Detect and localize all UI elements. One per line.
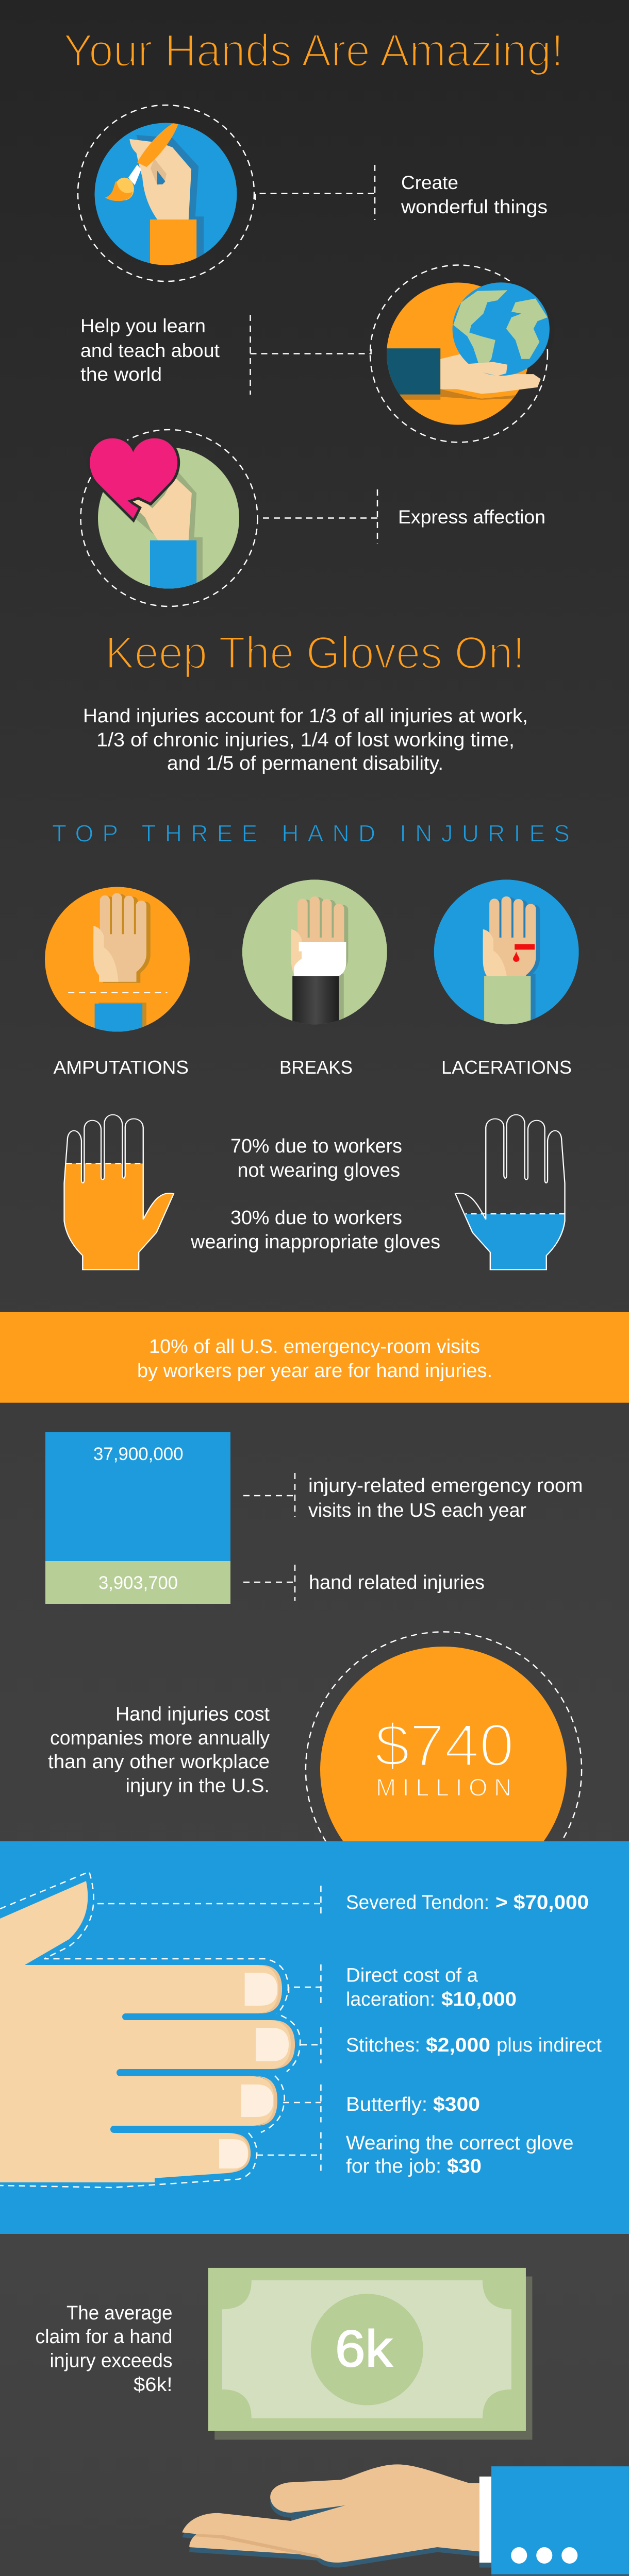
cost: stitches: $2,000 bbox=[426, 2035, 490, 2056]
bar: all injury visits: 37,900,000 bbox=[93, 1444, 184, 1464]
text: average claim: injury exceeds bbox=[49, 2350, 172, 2372]
icon: hand with fingers bbox=[0, 1881, 295, 2182]
dashed outline of hand bbox=[0, 1872, 300, 2188]
text: help you learn: Help you learn bbox=[80, 315, 206, 336]
panel: lacerations bbox=[434, 879, 579, 1078]
text: hand injuries cost: Hand injuries cost bbox=[115, 1703, 270, 1725]
icon: open hand with blue sleeve bbox=[182, 2464, 629, 2576]
text: hand injuries account: 1/3 of chronic injuries, 1/4 of lost working time, bbox=[96, 730, 515, 751]
cost: severed tendon bbox=[346, 1892, 589, 1913]
finger tips bbox=[227, 1965, 295, 2173]
dashed ring: affection bbox=[80, 430, 258, 606]
text: causes percentages: 30% due to workers bbox=[230, 1207, 402, 1229]
connector: hand injuries bbox=[243, 1565, 295, 1601]
cost: correct glove: for the job: bbox=[346, 2156, 441, 2177]
text: hand injuries account: and 1/5 of permanent disability. bbox=[167, 753, 443, 774]
icon: hand painting with brush bbox=[95, 120, 237, 268]
text: average claim: $6k! bbox=[134, 2374, 172, 2396]
text: create wonderful things: wonderful things bbox=[401, 196, 548, 217]
connector: learn bbox=[251, 315, 371, 395]
label: injury visits: visits in the US each year bbox=[308, 1500, 526, 1521]
callout: 740 million: $740 bbox=[375, 1711, 514, 1778]
icon: glove 30 percent filled bbox=[455, 1115, 565, 1269]
title: Your Hands Are Amazing: Your Hands Are Amazing! bbox=[63, 25, 564, 76]
chart: emergency room visits stacked block bbox=[45, 1432, 583, 1604]
text: hand injuries account: Hand injuries account for 1/3 of all injuries at work, bbox=[83, 705, 528, 727]
cost: butterfly: Butterfly: bbox=[346, 2094, 427, 2115]
cost: stitches bbox=[346, 2035, 602, 2056]
icon: amputated hand bbox=[45, 887, 190, 1037]
text: create wonderful things: Create bbox=[401, 172, 458, 193]
icon: glove 70 percent filled bbox=[64, 1115, 174, 1269]
bar: hand injury visits: 3,903,700 bbox=[98, 1573, 178, 1593]
panel: cost of injuries on blue band bbox=[0, 1841, 629, 2234]
label: injury visits: injury-related emergency room bbox=[308, 1475, 583, 1497]
text: help you learn: the world bbox=[80, 364, 162, 385]
cost: laceration: $10,000 bbox=[441, 1989, 517, 2010]
label: breaks: BREAKS bbox=[279, 1057, 353, 1078]
cost: butterfly: $300 bbox=[433, 2094, 480, 2115]
panel: amputations bbox=[45, 887, 190, 1078]
cost: laceration: laceration: bbox=[346, 1989, 435, 2010]
heading: Keep The Gloves On: Keep The Gloves On! bbox=[105, 627, 525, 678]
panel: create wonderful things bbox=[78, 105, 548, 281]
text: express affection: Express affection bbox=[398, 506, 545, 528]
text: causes percentages: not wearing gloves bbox=[237, 1160, 400, 1181]
panel: breaks bbox=[242, 879, 387, 1078]
label: hand injuries: hand related injuries bbox=[309, 1572, 485, 1594]
text: causes percentages: wearing inappropriate gloves bbox=[190, 1231, 440, 1253]
connector: create bbox=[255, 165, 375, 220]
panel: orange emergency-room band: 10% of all U.S. emergency-room visits bbox=[149, 1336, 480, 1358]
cost: laceration bbox=[346, 1965, 517, 2010]
connector: injury visits bbox=[243, 1473, 295, 1517]
callout: 740 million: MILLION bbox=[376, 1773, 511, 1801]
connectors to costs bbox=[97, 1886, 321, 2175]
panel: causes of injury bbox=[64, 1115, 565, 1269]
text: create wonderful things bbox=[401, 172, 548, 217]
text: hand injuries cost: injury in the U.S. bbox=[126, 1775, 270, 1797]
cost: severed tendon: Severed Tendon: bbox=[346, 1892, 489, 1913]
dashed ring: learn bbox=[370, 265, 548, 442]
panel: help you learn bbox=[80, 265, 554, 442]
text: causes percentages: 70% due to workers bbox=[230, 1136, 402, 1157]
text: hand injuries cost: companies more annually bbox=[50, 1727, 270, 1749]
icon: hand holding globe bbox=[386, 280, 554, 425]
icon: banknote 6k: 6k bbox=[335, 2320, 393, 2378]
icon: bandaged hand bbox=[242, 879, 387, 1026]
icon: banknote 6k bbox=[208, 2268, 532, 2440]
connector: affection bbox=[258, 489, 377, 544]
text: hand injuries cost: than any other workplace bbox=[48, 1751, 270, 1773]
text: help you learn: and teach about bbox=[80, 340, 220, 361]
text: hand injuries cost bbox=[48, 1703, 270, 1797]
callout: 740 million bbox=[305, 1631, 583, 1841]
panel: express affection bbox=[80, 430, 545, 606]
text: average claim: claim for a hand bbox=[35, 2326, 172, 2348]
label: injury visits bbox=[308, 1475, 583, 1521]
dashed ring: create bbox=[78, 105, 254, 281]
text: average claim: The average bbox=[67, 2302, 172, 2324]
text: hand injuries account bbox=[83, 705, 528, 774]
text: help you learn bbox=[80, 315, 220, 385]
text: average claim bbox=[35, 2302, 172, 2396]
cost: correct glove: Wearing the correct glove bbox=[346, 2132, 573, 2154]
cost: stitches: plus indirect bbox=[496, 2035, 602, 2056]
icon: cut hand bbox=[434, 879, 579, 1026]
icon: hand holding heart bbox=[90, 438, 239, 589]
label: amputations: AMPUTATIONS bbox=[54, 1057, 189, 1078]
cost: correct glove bbox=[346, 2132, 573, 2177]
cost: stitches: Stitches: bbox=[346, 2035, 420, 2056]
bar: hand injury visits bbox=[45, 1561, 230, 1604]
text: causes percentages bbox=[190, 1136, 440, 1253]
cost: correct glove: $30 bbox=[447, 2156, 482, 2177]
cost: laceration: Direct cost of a bbox=[346, 1965, 478, 1987]
bar: all injury visits bbox=[45, 1432, 230, 1561]
finger nails bbox=[219, 1973, 289, 2168]
cost: severed tendon: > $70,000 bbox=[495, 1892, 589, 1913]
cost: butterfly bbox=[346, 2094, 480, 2115]
heading: top three hand injuries: TOP THREE HAND INJURIES bbox=[52, 820, 570, 847]
panel: orange emergency-room band bbox=[0, 1312, 629, 1403]
panel: orange emergency-room band: by workers per year are for hand injuries. bbox=[137, 1360, 492, 1382]
label: lacerations: LACERATIONS bbox=[441, 1057, 572, 1078]
